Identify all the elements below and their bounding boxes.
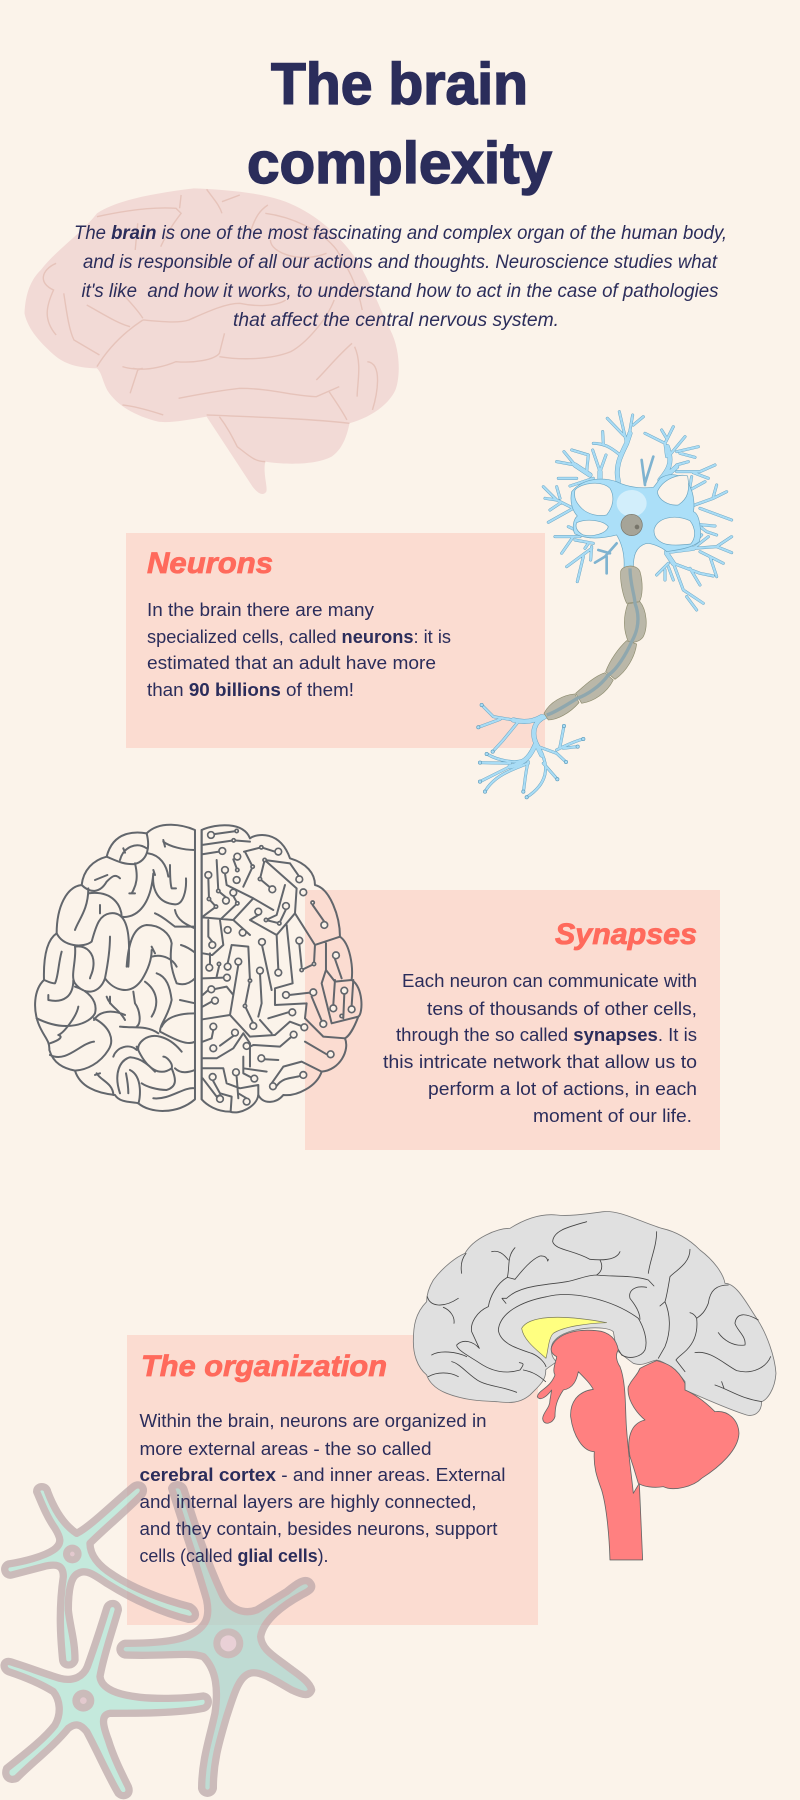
left hemisphere with folds [35, 825, 195, 1111]
icon: neuron nucleus [621, 514, 642, 536]
text: neurons: specialized cells, called neurons: it is [147, 627, 451, 647]
heading: neurons: Neurons [147, 547, 273, 580]
icon: glial cell upper left [5, 1485, 195, 1665]
icon: half-organic half-circuit brain [35, 825, 361, 1112]
text: neurons: In the brain there are many [147, 600, 374, 620]
intro text [74, 223, 727, 331]
icon: glial cell lower left [4, 1604, 208, 1796]
panel: the organization background [127, 1335, 538, 1625]
title [247, 52, 552, 196]
intro text: The brain is one of the most fascinating and complex organ of the human body, [74, 223, 727, 244]
intro text: it's like and how it works, to understand how to act in the case of pathologies [82, 281, 719, 302]
text: the organization: more external areas - the so called [140, 1439, 432, 1459]
icon: glial cell large right [120, 1485, 312, 1793]
icon: pale brain behind intro [24, 188, 399, 494]
text: synapses: this intricate network that allow us to [383, 1052, 697, 1072]
text: neurons: than 90 billions of them! [147, 680, 354, 700]
panel text: the organization [140, 1350, 506, 1566]
text: the organization [140, 1411, 506, 1566]
text: the organization: cerebral cortex - and inner areas. External [140, 1465, 506, 1485]
fornix in yellow [522, 1317, 607, 1358]
brainstem [537, 1330, 643, 1560]
text: neurons: estimated that an adult have more [147, 653, 436, 673]
text: synapses: perform a lot of actions, in each [428, 1079, 697, 1099]
right hemisphere circuit [202, 825, 361, 1112]
title: The brain [271, 52, 528, 117]
text: the organization: cells (called glial cells). [140, 1546, 329, 1566]
cerebrum [413, 1212, 776, 1415]
text: the organization: Within the brain, neurons are organized in [140, 1411, 486, 1431]
cerebellum [628, 1361, 739, 1489]
text: synapses: through the so called synapses. It is [396, 1025, 697, 1045]
intro text: that affect the central nervous system. [233, 310, 559, 331]
intro text: and is responsible of all our actions and thoughts. Neuroscience studies what [83, 252, 718, 273]
icon: sagittal brain section [413, 1212, 776, 1560]
text: synapses: tens of thousands of other cells, [427, 999, 697, 1019]
icon: axon terminals [477, 703, 585, 799]
heading: the organization: The organization [141, 1350, 387, 1383]
icon: neuron axon sheath [544, 566, 646, 720]
heading: synapses: Synapses [555, 918, 697, 951]
text: synapses [383, 971, 697, 1126]
panel: synapses [305, 890, 720, 1150]
text: synapses: moment of our life. [533, 1106, 692, 1126]
title: complexity [247, 131, 552, 196]
icon: neuron [477, 412, 732, 799]
panel: neurons [126, 533, 545, 748]
text: synapses: Each neuron can communicate with [402, 971, 697, 991]
text: neurons [147, 600, 451, 700]
text: the organization: and they contain, besides neurons, support [140, 1519, 498, 1539]
text: the organization: and internal layers are highly connected, [140, 1492, 476, 1512]
